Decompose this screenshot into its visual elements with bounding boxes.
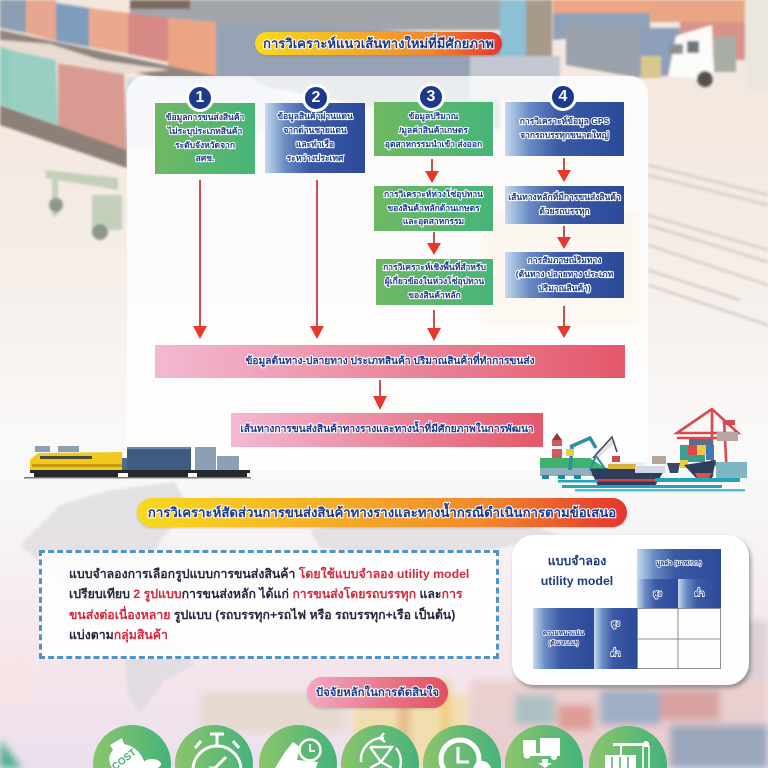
dashed text box: utility model description: แบ่งตามกลุ่มสินค้า (69, 628, 168, 642)
step 3 supply chain analysis box: และอุตสาหกรรม (403, 216, 464, 226)
header: density: (ตัน/ลบ.ม.) (548, 640, 579, 646)
header: density (533, 608, 594, 669)
number badge 1 (186, 84, 214, 112)
pill: key decision factors: ปัจจัยหลักในการตัดสินใจ (316, 686, 439, 698)
number badge 1: 1 (196, 89, 204, 106)
step 2 box: และท่าเรือ (296, 139, 334, 149)
step 3 box: อุตสาหกรรมนำเข้า ส่งออก (385, 139, 482, 149)
step 4 survey box: การสัมภาษณ์ริมทาง (528, 255, 601, 265)
icon: stopwatch (175, 725, 253, 768)
header: value (637, 549, 721, 579)
section title: rail and water share analysis: การวิเคราะห์สัดส่วนการขนส่งสินค้าทางรางและทางน้ำกรณีดำเนินการตามข้อเสนอ (148, 505, 616, 520)
title: potential route analysis: การวิเคราะห์แนวเส้นทางใหม่ที่มีศักยภาพ (263, 36, 494, 51)
arrow: routes to survey (557, 226, 571, 249)
step 4 main routes box: เส้นทางหลักที่มีการขนส่งสินค้า (508, 192, 621, 202)
step 2 box: จากด่านชายแดน (283, 125, 347, 135)
icon: thumb up with clock (259, 725, 337, 768)
icon: truck and forklift transfer (505, 725, 583, 768)
potential routes bar (231, 413, 543, 447)
header: density high: สูง (611, 619, 620, 628)
arrow: data bar to routes (373, 380, 387, 410)
panel: utility model matrix (512, 535, 749, 685)
step 3 spatial analysis box: ของสินค้าหลัก (408, 290, 461, 300)
content panel (127, 76, 648, 470)
step 4 survey box: (ต้นทาง-ปลายทาง ประเภท (516, 269, 613, 279)
illustration: port with ships and cranes (540, 407, 747, 492)
section title: rail and water share analysis (137, 498, 627, 527)
illustration: freight train (24, 446, 251, 478)
number badge 4 (549, 83, 577, 111)
number badge 4: 4 (559, 88, 567, 105)
step 1 box: ไม่ระบุประเภทสินค้า (168, 126, 242, 136)
step 2 box: ข้อมูลสินค้าผ่านแดน (277, 111, 353, 121)
step 4 box: การวิเคราะห์ข้อมูล GPS (520, 116, 609, 126)
arrow: step 3 to supply chain (425, 159, 439, 183)
data bar (155, 345, 625, 378)
matrix title: utility model (541, 574, 613, 588)
potential routes bar: เส้นทางการขนส่งสินค้าทางรางและทางน้ำที่มีศักยภาพในการพัฒนา (240, 424, 534, 435)
step 3 box (374, 102, 493, 156)
header: value low: ต่ำ (695, 589, 704, 598)
header: density low (594, 639, 637, 669)
step 4 main routes box (505, 186, 624, 224)
icon: clock with alert (423, 725, 501, 768)
matrix title (541, 554, 613, 588)
number badge 2 (302, 84, 330, 112)
header: density low: ต่ำ (611, 649, 620, 658)
arrow: survey down (557, 306, 571, 338)
step 4 survey box: ปริมาณสินค้า) (538, 283, 591, 293)
header: value low (678, 579, 721, 608)
header: value high (637, 579, 678, 608)
dashed text box: utility model description (39, 550, 499, 659)
empty matrix cells (637, 608, 721, 669)
step 1 box (155, 103, 255, 174)
dashed text box: utility model description: เปรียบเทียบ 2 รูปแบบการขนส่งหลัก ได้แก่ การขนส่งโดยรถบรรทุก และการ (69, 587, 462, 601)
header: value high: สูง (653, 589, 662, 598)
icon: port crane with container (589, 726, 667, 768)
step 3 box: /มูลค่าสินค้าเกษตร (399, 125, 468, 135)
step 3 supply chain analysis box: ของสินค้าหลักด้านเกษตร (387, 203, 480, 213)
step 3 spatial analysis box: ผู้เกี่ยวข้องในห่วงโซ่อุปทาน (385, 276, 484, 286)
step 4 box: จากรถบรรทุกขนาดใหญ่ (520, 130, 609, 140)
number badge 3 (417, 83, 445, 111)
step 1 box: สศช. (196, 153, 214, 163)
number badge 3: 3 (427, 88, 435, 105)
step 3 box: ข้อมูลปริมาณ (409, 111, 458, 121)
header: density high (594, 608, 637, 639)
header: density: ความหนาแน่น (543, 630, 584, 636)
dashed text box: utility model description: ขนส่งต่อเนื่องหลาย รูปแบบ (รถบรรทุก+รถไฟ หรือ รถบรรทุก+เรือ เป็นต้น) (69, 608, 455, 622)
pill: key decision factors (307, 677, 448, 708)
lower: map and port (20, 482, 560, 715)
step 1 box: ระดับจังหวัดจาก (175, 140, 235, 150)
step 3 supply chain analysis box (374, 186, 493, 231)
arrow: supply chain to spatial (427, 232, 441, 255)
step 3 spatial analysis box: การวิเคราะห์เชิงพื้นที่สำหรับ (383, 262, 486, 272)
arrow: step 2 down (310, 180, 324, 339)
data bar: ข้อมูลต้นทาง-ปลายทาง ประเภทสินค้า ปริมาณสินค้าที่ทำการขนส่ง (245, 356, 535, 367)
step 1 box: ข้อมูลการขนส่งสินค้า (166, 112, 244, 122)
title: potential route analysis (255, 32, 502, 55)
step 4 main routes box: ด้วยรถบรรทุก (539, 206, 590, 216)
arrow: spatial down (427, 310, 441, 341)
step 3 spatial analysis box (376, 259, 493, 305)
arrow: step 4 to routes (557, 158, 571, 182)
step 2 box: ระหว่างประเทศ (287, 153, 343, 163)
number badge 2: 2 (312, 89, 320, 106)
dashed text box: utility model description: แบบจำลองการเลือกรูปแบบการขนส่งสินค้า โดยใช้แบบจำลอง utility model (69, 567, 469, 581)
step 2 box (265, 103, 365, 173)
step 4 survey box (505, 252, 624, 298)
icon: cost bag (93, 725, 171, 768)
step 4 box (505, 102, 624, 156)
matrix title: แบบจำลอง (548, 554, 606, 568)
icon: hourglass cycle (341, 725, 419, 768)
step 3 supply chain analysis box: การวิเคราะห์ห่วงโซ่อุปทาน (384, 189, 483, 199)
header: value: มูลค่า (บาท/กก.) (656, 560, 702, 567)
factor icons row (93, 725, 667, 768)
arrow: step 1 down (193, 180, 207, 339)
